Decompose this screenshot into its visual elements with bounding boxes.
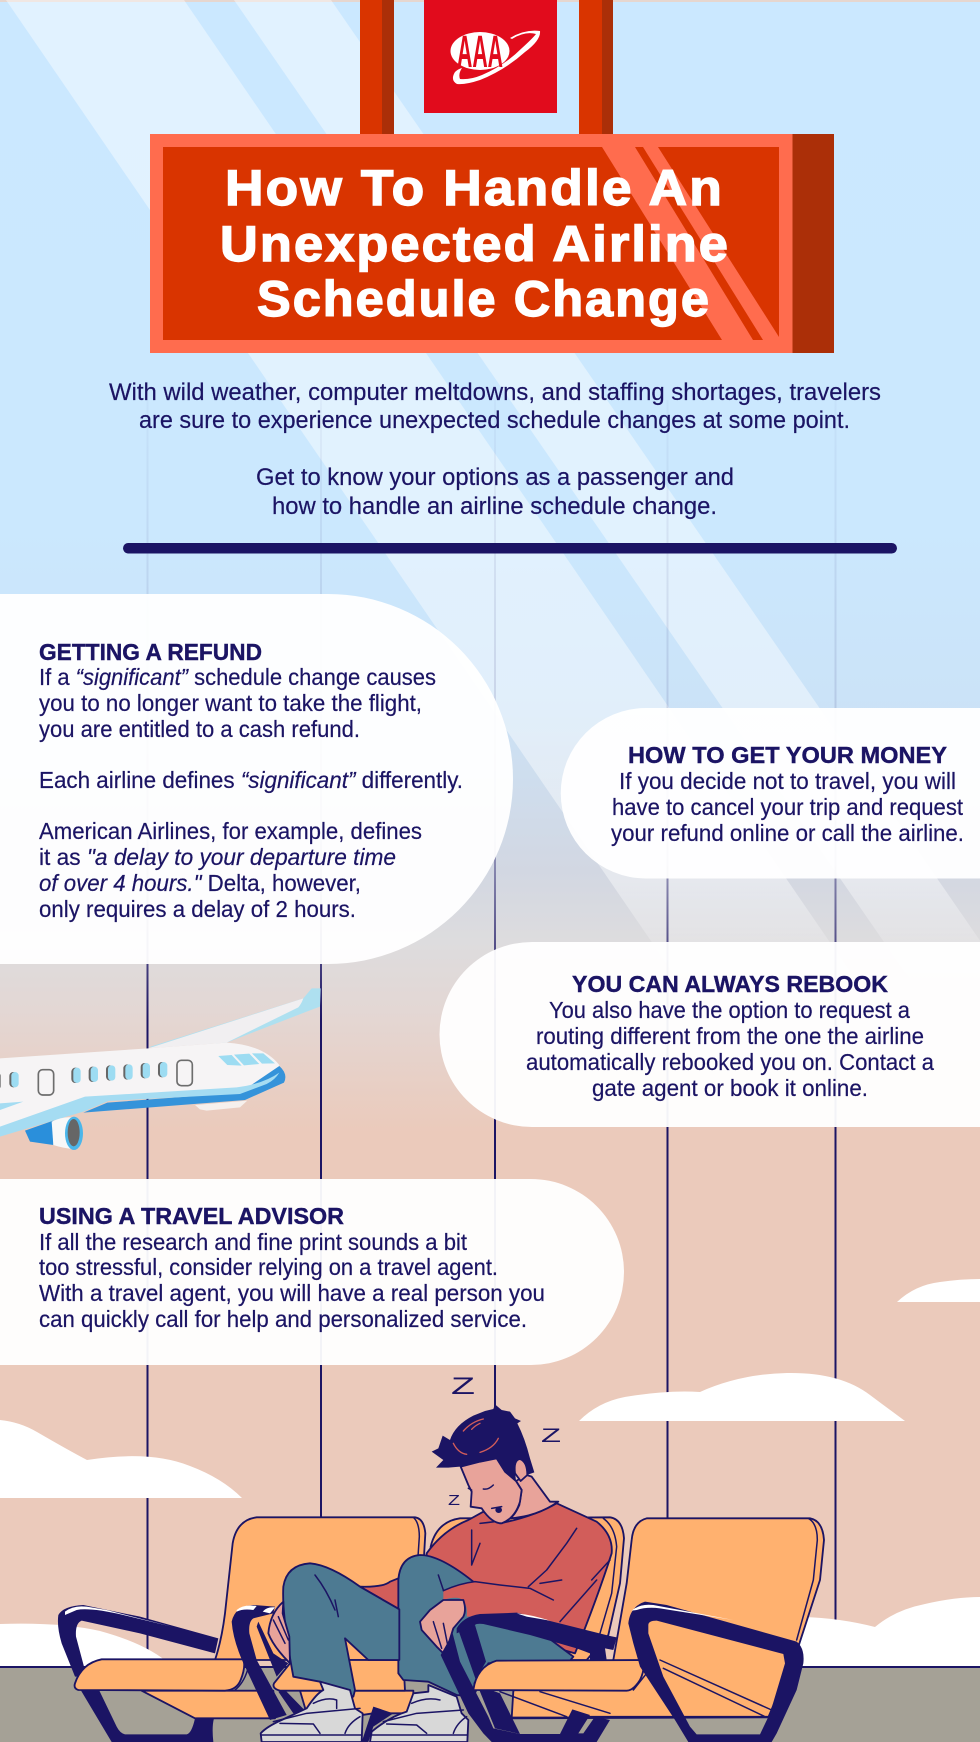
- panel: getting a refund: [0, 594, 513, 964]
- panel: getting a refund: it as "a delay to your departure time: [39, 844, 396, 870]
- panel: getting a refund: Each airline defines “significant” differently.: [39, 767, 463, 793]
- panel: you can always rebook: gate agent or book it online.: [592, 1075, 868, 1101]
- panel: using a travel advisor: USING A TRAVEL ADVISOR: [39, 1203, 344, 1229]
- panel: you can always rebook: [440, 942, 980, 1127]
- title: Unexpected Airline: [220, 216, 730, 272]
- right seat: [473, 1660, 644, 1691]
- panel: getting a refund: If a “significant” schedule change causes: [39, 664, 436, 690]
- intro text: [109, 379, 881, 520]
- panel: getting a refund: you are entitled to a cash refund.: [39, 716, 360, 742]
- eye and mouth: [468, 1485, 502, 1508]
- panel: getting a refund: you to no longer want to take the flight,: [39, 690, 422, 716]
- ear: [515, 1459, 527, 1481]
- intro text: are sure to experience unexpected schedule changes at some point.: [139, 407, 850, 434]
- panel: how to get your money: have to cancel your trip and request: [612, 794, 964, 820]
- hair: [432, 1404, 534, 1481]
- center chair frame: [232, 1605, 306, 1720]
- trousers: [283, 1555, 573, 1697]
- under-seat panels: [142, 1691, 413, 1718]
- shoes: [261, 1682, 468, 1742]
- floor: [0, 1666, 980, 1742]
- panel: how to get your money: HOW TO GET YOUR MONEY: [628, 742, 947, 768]
- collar: [480, 1503, 557, 1523]
- sleeping z letters: Z: [451, 1373, 475, 1400]
- panel: how to get your money: your refund online or call the airline.: [611, 820, 964, 846]
- panel: you can always rebook: routing different from the one the airline: [536, 1023, 924, 1049]
- sweater behind left leg: [360, 1578, 399, 1609]
- sweater body: [427, 1503, 612, 1653]
- panel: using a travel advisor: With a travel agent, you will have a real person you: [39, 1280, 545, 1306]
- panel: getting a refund: of over 4 hours." Delta, however,: [39, 870, 361, 896]
- hands: [268, 1600, 465, 1663]
- seat edge lines: [500, 1660, 772, 1717]
- title: Schedule Change: [257, 271, 711, 327]
- right chair frame: [628, 1602, 804, 1742]
- sweater sleeve: [443, 1582, 550, 1617]
- sleeping z letters: Z: [448, 1492, 460, 1509]
- clouds: [0, 1279, 980, 1667]
- panel: how to get your money: If you decide not to travel, you will: [619, 768, 956, 794]
- airplane: [0, 988, 321, 1150]
- neck: [510, 1475, 558, 1518]
- hair highlights: [453, 1419, 498, 1454]
- seats: [75, 1659, 405, 1691]
- title: [220, 160, 730, 327]
- logo: AAA: AAA: [457, 26, 503, 77]
- intro text: Get to know your options as a passenger and: [256, 464, 734, 491]
- panel: using a travel advisor: too stressful, consider relying on a travel agent.: [39, 1254, 498, 1280]
- panel: using a travel advisor: [0, 1179, 624, 1365]
- panel: getting a refund: American Airlines, for example, defines: [39, 818, 422, 844]
- chair backs: [215, 1517, 824, 1718]
- panel: you can always rebook: automatically rebooked you on. Contact a: [526, 1049, 934, 1075]
- panel: you can always rebook: YOU CAN ALWAYS REBOOK: [572, 971, 888, 997]
- panel: you can always rebook: You also have the option to request a: [549, 997, 910, 1023]
- divider bar: [123, 543, 897, 554]
- intro text: With wild weather, computer meltdowns, and staffing shortages, travelers: [109, 379, 881, 406]
- head with hair: [432, 1404, 558, 1523]
- intro text: how to handle an airline schedule change.: [272, 493, 717, 520]
- title sign: [150, 134, 834, 353]
- panel: using a travel advisor: can quickly call for help and personalized service.: [39, 1306, 527, 1332]
- title: How To Handle An: [225, 160, 724, 216]
- sleeping z letters: [448, 1373, 562, 1509]
- sleeping z letters: Z: [541, 1426, 562, 1447]
- panel: getting a refund: GETTING A REFUND: [39, 639, 262, 665]
- panel: getting a refund: only requires a delay of 2 hours.: [39, 896, 356, 922]
- front chair frame: [441, 1613, 617, 1742]
- panel: how to get your money: [561, 708, 980, 878]
- seated sleeping traveler and chairs: [58, 1503, 824, 1742]
- sign support posts: [360, 0, 613, 135]
- panel: using a travel advisor: If all the research and fine print sounds a bit: [39, 1229, 468, 1255]
- sweater fold lines: [443, 1528, 610, 1622]
- logo: AAA: [424, 0, 557, 113]
- face: [461, 1458, 522, 1523]
- left chair frame: [58, 1605, 218, 1742]
